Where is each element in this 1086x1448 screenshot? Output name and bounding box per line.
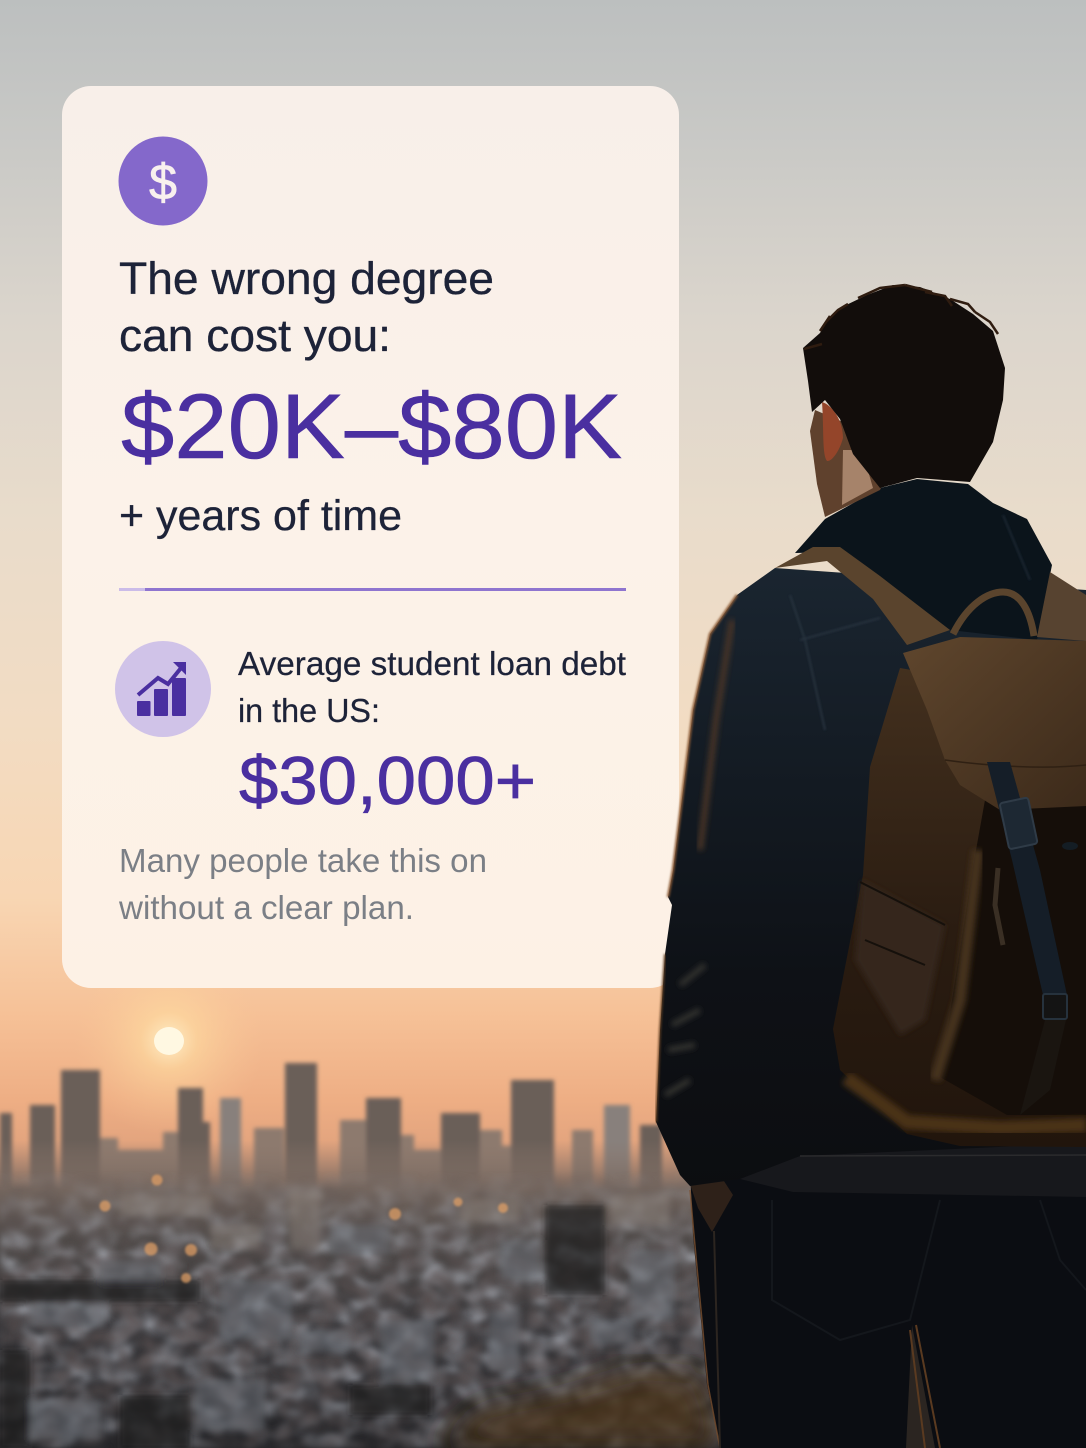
backpack handle xyxy=(953,592,1034,636)
backpack flap xyxy=(903,637,1086,810)
text: average student loan debt: Average student loan debt xyxy=(238,645,626,682)
heading: the wrong degree can cost you: The wrong degree xyxy=(119,253,494,304)
ground gap between the legs xyxy=(900,1320,940,1448)
sun xyxy=(74,946,264,1136)
ear xyxy=(822,402,843,461)
jacket xyxy=(656,568,1086,1197)
text: average student loan debt xyxy=(238,645,626,729)
backpack body xyxy=(833,668,1086,1147)
backpack side pocket detail xyxy=(855,880,945,1035)
text: average student loan debt: in the US: xyxy=(238,692,380,729)
heading: the wrong degree can cost you xyxy=(119,253,494,361)
neck and face edge xyxy=(810,410,890,517)
hood xyxy=(795,479,1052,640)
text: closing note: without a clear plan. xyxy=(118,889,414,926)
hair wisps xyxy=(804,285,998,349)
heading: the wrong degree can cost you: can cost you: xyxy=(119,310,391,361)
panel: cost card xyxy=(62,86,679,988)
big number: cost range: $20K–$80K xyxy=(121,376,622,478)
divider xyxy=(119,588,626,591)
text: years of time: + years of time xyxy=(119,492,402,540)
backpack right strap xyxy=(1037,572,1086,641)
pants xyxy=(690,1170,1086,1448)
text: closing note: Many people take this on xyxy=(119,842,487,879)
blurred skyline towers xyxy=(0,1063,662,1217)
icon: rising bar chart badge xyxy=(115,641,211,737)
blurred city below the skyline xyxy=(0,1140,720,1448)
backpack dark front pocket xyxy=(940,800,1086,1115)
hand in pocket xyxy=(690,1178,733,1232)
icon: dollar badge xyxy=(118,136,208,226)
backpack strap xyxy=(775,547,950,645)
person with backpack seen from behind xyxy=(656,285,1086,1448)
text: closing note xyxy=(118,842,487,926)
vertical strap and buckles xyxy=(987,762,1078,1115)
big number: average debt: $30,000+ xyxy=(239,743,536,819)
hair xyxy=(803,285,1005,488)
icon: dollar badge: $ xyxy=(149,154,177,210)
